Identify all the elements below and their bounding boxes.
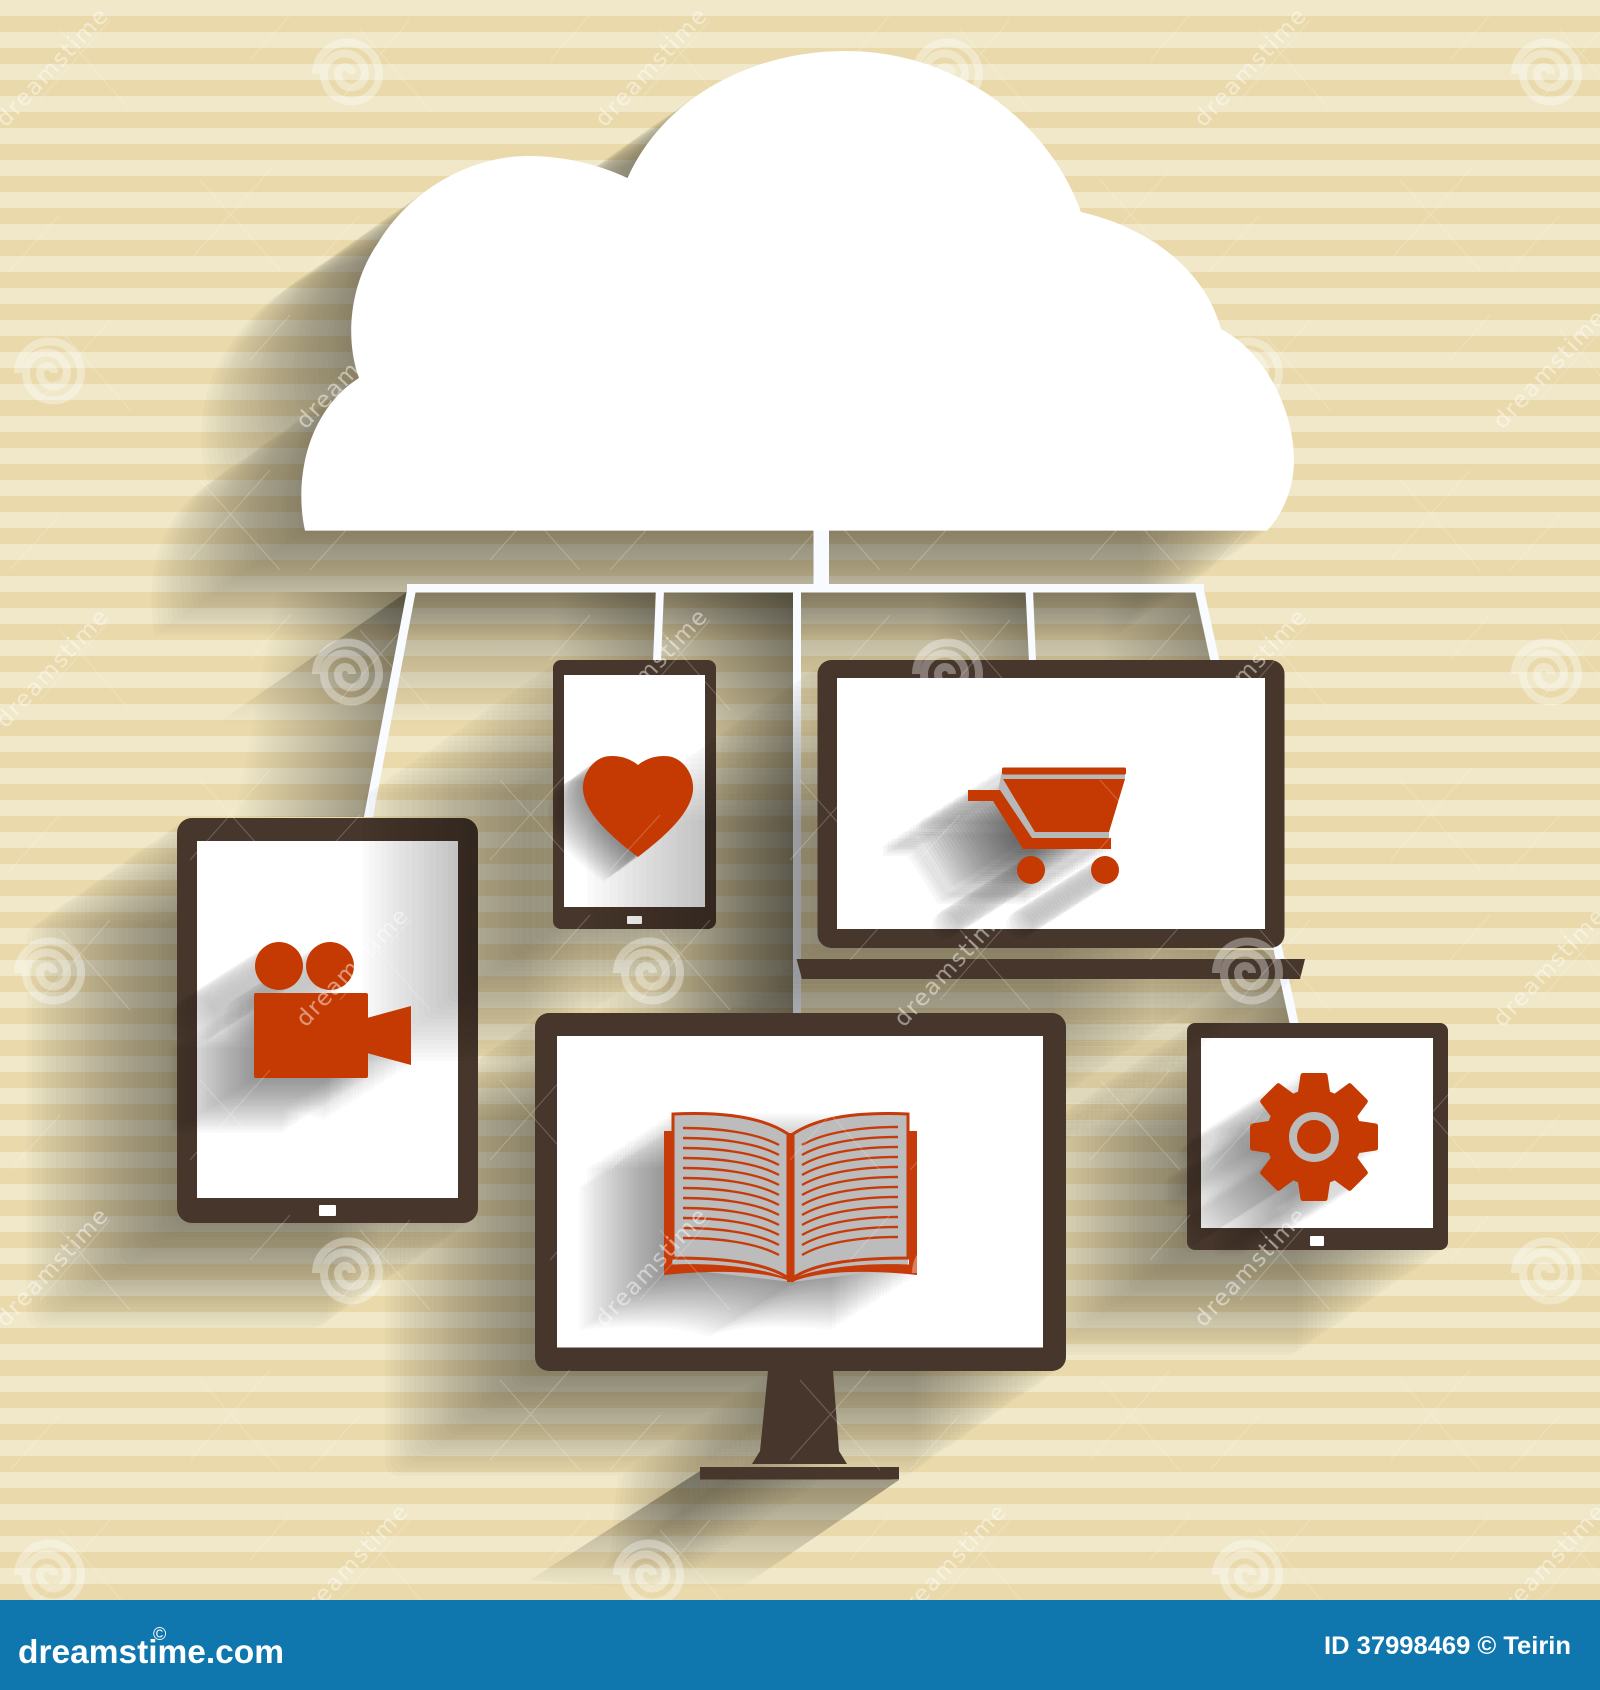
icon: video camera on large tablet — [254, 942, 411, 1078]
shadow: connector lines — [215, 592, 1290, 1023]
device: smartphone — [553, 660, 716, 929]
watermark: spirals and diagonal text: dreamstime — [1189, 603, 1313, 733]
footer image id and credit: ID 37998469 © Teirin — [1324, 1632, 1571, 1660]
watermark: spirals and diagonal text: dreamstime — [889, 304, 1013, 434]
device: desktop monitor with open book icon — [535, 1013, 1066, 1480]
icon: open book — [664, 1113, 917, 1282]
footer logo text: dreamstime.com — [18, 1633, 284, 1670]
icon: gear — [1250, 1073, 1378, 1201]
watermark: spirals and diagonal text: dreamstime — [590, 603, 714, 733]
device: laptop with shopping cart icon — [796, 660, 1305, 979]
connector lines: cloud to devices — [364, 528, 1299, 1025]
device: small tablet with gear icon — [1187, 1023, 1448, 1250]
watermark: spirals and diagonal text: dreamstime — [889, 902, 1013, 1032]
watermark: spirals and diagonal text: dreamstime — [1189, 1202, 1313, 1332]
shadow: long cloud shadow — [301, 51, 1294, 531]
shadow: desktop monitor — [530, 1013, 1066, 1595]
watermark: spirals and diagonal text: dreamstime — [590, 2, 714, 132]
watermark: spirals and diagonal text: dreamstime — [291, 1498, 415, 1628]
watermark: spirals and diagonal text: dreamstime — [291, 902, 415, 1032]
device: large tablet — [177, 818, 478, 1223]
footer banner — [0, 1600, 1600, 1690]
icon: shopping cart — [968, 768, 1126, 884]
icon: heart on smartphone — [583, 756, 693, 857]
watermark: spirals and diagonal text: dreamstime — [590, 1202, 714, 1332]
watermark: spirals and diagonal text: dreamstime — [889, 1498, 1013, 1628]
watermark: spirals and diagonal text: dreamstime — [291, 304, 415, 434]
watermark: spirals and diagonal text: dreamstime — [1189, 2, 1313, 132]
footer logo mark: © — [153, 1624, 166, 1644]
cloud — [301, 51, 1294, 531]
